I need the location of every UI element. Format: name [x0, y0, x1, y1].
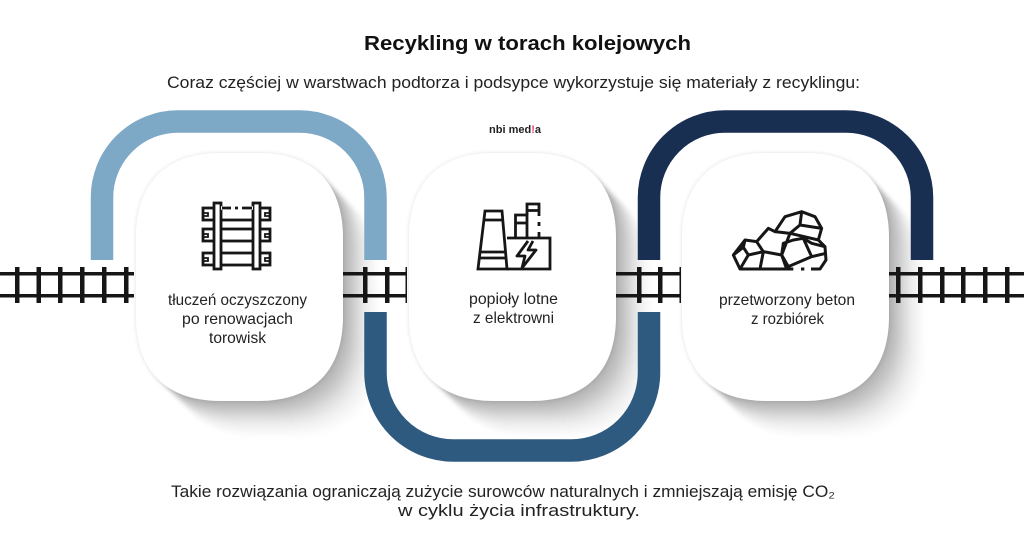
railway track: segment between cards 1 and 2: [343, 267, 407, 303]
mid blue track arc: [376, 312, 649, 450]
card shadows: [139, 156, 925, 437]
closing text: w cyklu życia infrastruktury.: [397, 502, 640, 520]
closing text: Takie rozwiązania ograniczają zużycie surowców naturalnych i zmniejszają emisję CO₂: [171, 483, 835, 501]
panel: card 1: [136, 153, 343, 401]
icon: power plant: [478, 204, 550, 269]
card 3 label: z rozbiórek: [751, 311, 825, 328]
card 1 label: po renowacjach: [182, 311, 293, 328]
logo: nbi media: nbi med!a: [489, 124, 542, 136]
card 2 label: popioły lotne: [469, 291, 558, 308]
panel: card 3: [682, 153, 889, 401]
closing text: [171, 483, 835, 520]
panel: card 2: [409, 153, 616, 401]
light blue track arc: [102, 122, 376, 260]
card 2 label: z elektrowni: [473, 310, 554, 327]
railway track: left segment: [0, 267, 134, 303]
icon: rail track: [203, 203, 270, 269]
card 3 label: przetworzony beton: [719, 292, 855, 309]
card 2 label: [469, 291, 558, 327]
railway track: segment between cards 2 and 3: [616, 267, 681, 303]
card 1 label: tłuczeń oczyszczony: [168, 292, 307, 309]
card 1 label: torowisk: [209, 330, 267, 347]
railway track: right segment: [889, 267, 1024, 303]
navy track arc: [649, 122, 922, 260]
card 3 label: [719, 292, 855, 328]
card 1 label: [168, 292, 307, 347]
intro text: Coraz częściej w warstwach podtorza i podsypce wykorzystuje się materiały z recyklingu:: [167, 73, 860, 92]
title: Recykling w torach kolejowych: [364, 33, 691, 55]
icon: rubble: [733, 212, 826, 269]
